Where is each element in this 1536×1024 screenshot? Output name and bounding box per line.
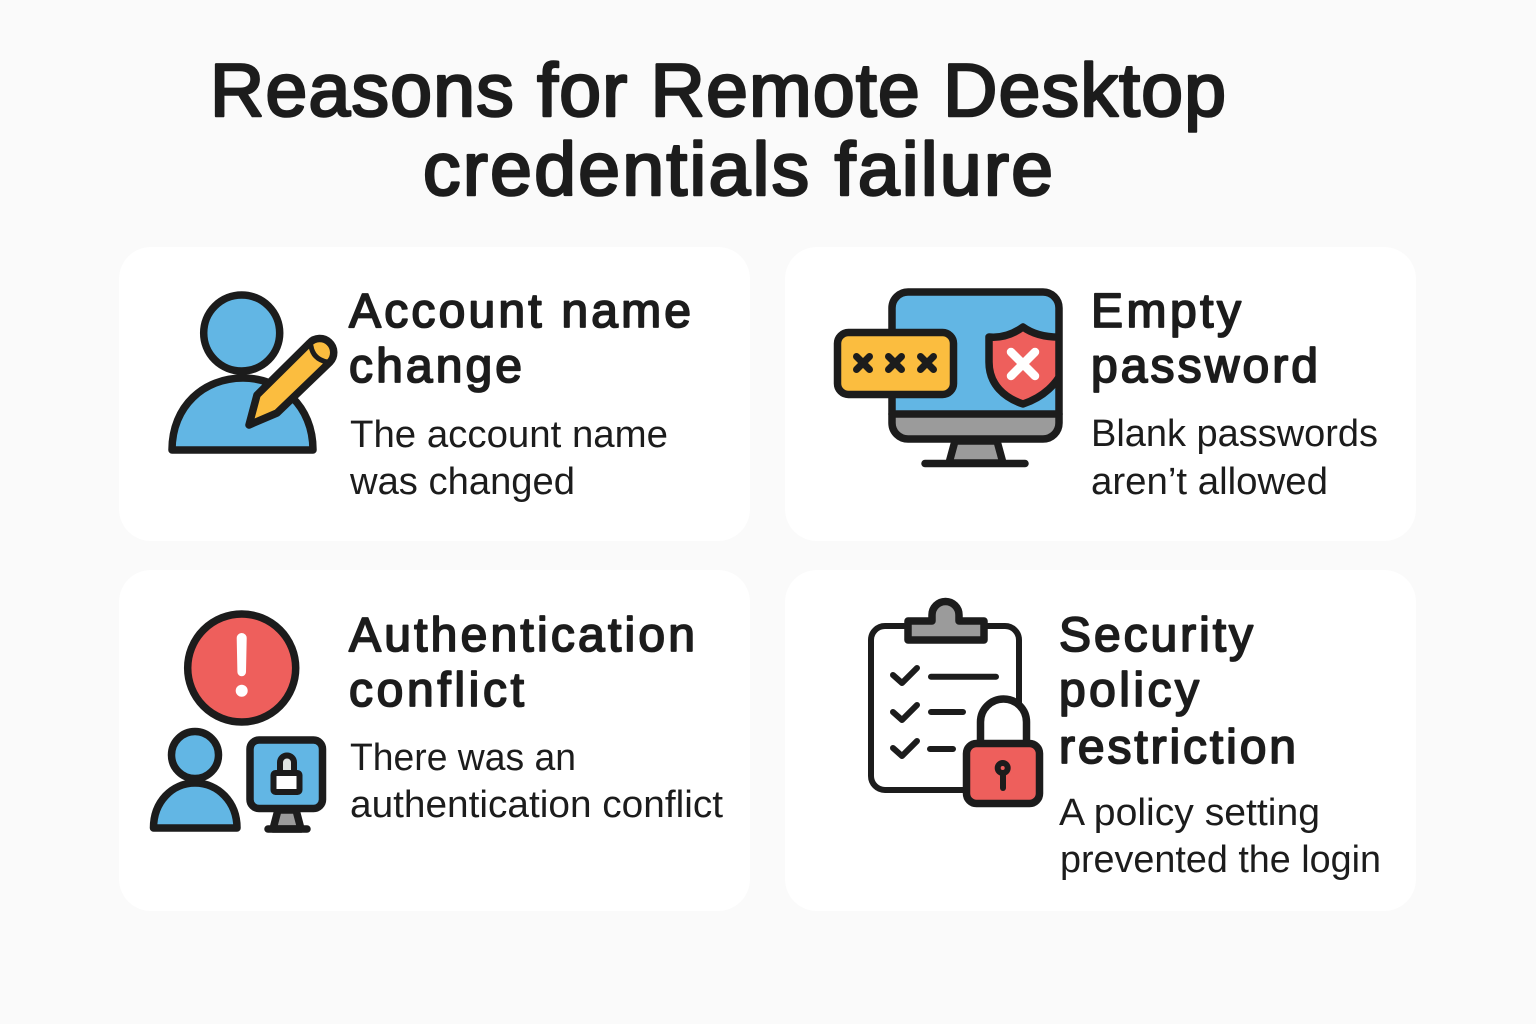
text: security policy description: prevented the login — [1060, 839, 1381, 881]
heading: security policy restriction: Security — [1059, 609, 1253, 662]
panel: authentication conflict — [119, 570, 750, 911]
text: authentication conflict description: authentication conflict — [350, 784, 723, 826]
heading: empty password: password — [1091, 340, 1318, 393]
panel: empty password — [834, 288, 1377, 494]
text: empty password description: aren’t allowed — [1091, 461, 1328, 503]
heading: empty password: Empty — [1091, 285, 1241, 338]
panel: security policy restriction — [785, 570, 1416, 911]
text: account name description: The account name — [350, 414, 668, 456]
text: authentication conflict description: There was an — [350, 737, 576, 779]
heading: security policy restriction: policy — [1059, 664, 1199, 717]
heading: authentication conflict: conflict — [349, 664, 524, 717]
icon: clipboard checklist with padlock — [871, 602, 1040, 804]
icon: monitor with password field and shield — [838, 292, 1066, 464]
icon: alert with user and locked monitor — [154, 614, 322, 829]
heading: security policy restriction — [1059, 609, 1296, 774]
panel: account name change — [119, 247, 750, 541]
text: empty password description: Blank passwords — [1091, 413, 1378, 455]
text: security policy description: A policy setting — [1059, 792, 1320, 834]
heading: empty password — [1091, 285, 1318, 393]
text: empty password description — [1091, 413, 1378, 503]
heading: account name change: change — [349, 340, 522, 393]
text: security policy description — [1059, 792, 1381, 881]
title: Reasons for Remote Desktop — [210, 48, 1226, 132]
text: authentication conflict description — [350, 737, 723, 826]
title — [210, 48, 1226, 211]
text: account name description: was changed — [349, 461, 575, 503]
heading: authentication conflict: Authentication — [349, 609, 695, 662]
heading: authentication conflict — [349, 609, 695, 717]
heading: security policy restriction: restriction — [1059, 721, 1296, 774]
heading: account name change: Account name — [349, 285, 691, 338]
title: credentials failure — [423, 127, 1053, 211]
heading: account name change — [349, 285, 691, 393]
text: account name description — [349, 414, 668, 503]
icon: user with pencil — [172, 295, 334, 450]
